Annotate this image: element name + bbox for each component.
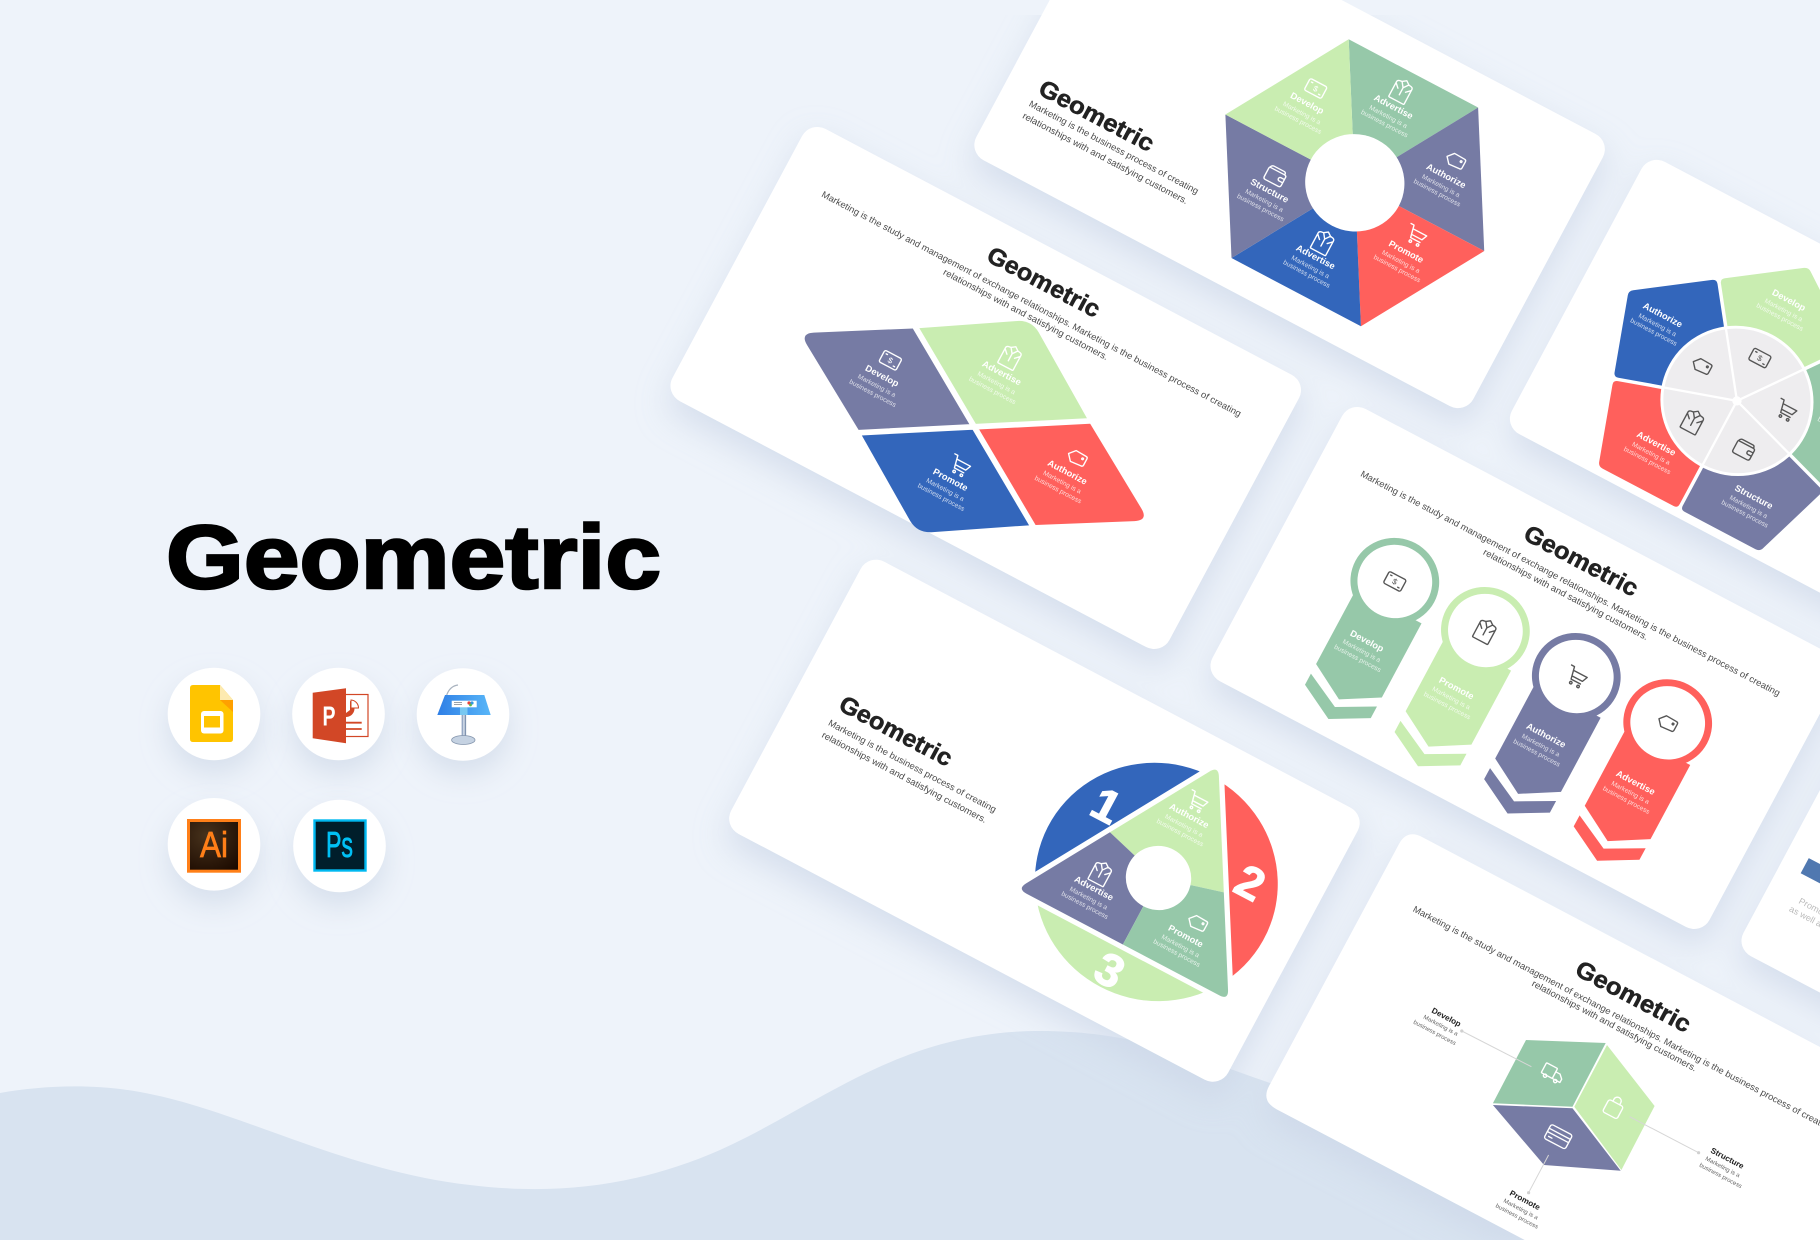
icon: PowerPoint bbox=[292, 668, 385, 760]
rhombus chart: business process bbox=[848, 379, 898, 409]
hexagon chart: Develop bbox=[1289, 90, 1326, 116]
heading: Geometric bbox=[1034, 75, 1159, 158]
circle and triangle chart: Marketing is a bbox=[1163, 813, 1204, 839]
arrow tag: Develop bbox=[1283, 522, 1455, 737]
pentagon chart: Marketing is a bbox=[1728, 495, 1769, 520]
rhombus chart: business process bbox=[1033, 475, 1083, 506]
icon: Illustrator bbox=[168, 798, 260, 891]
hexagon chart: business process bbox=[1273, 106, 1323, 136]
rhombus chart: Marketing is a bbox=[925, 477, 965, 503]
panel: arrow tags slide bbox=[1204, 401, 1820, 935]
pentagon chart: Marketing is a bbox=[1763, 298, 1804, 323]
pentagon chart: business process bbox=[1629, 317, 1679, 348]
hexagon chart bbox=[1167, 5, 1543, 360]
icon: PowerPoint: P bbox=[322, 700, 336, 732]
hexagon chart: Marketing is a bbox=[1290, 255, 1331, 280]
hexagon chart: Marketing is a bbox=[1380, 249, 1421, 275]
arrow tag: Authorize bbox=[1465, 617, 1636, 832]
arrow tag: Promote: business process bbox=[1422, 691, 1472, 722]
description: relationships with and satisfying customers. bbox=[1482, 547, 1650, 642]
hexagon chart: $ bbox=[1311, 84, 1320, 94]
slide text: relationships with and satisfying customers. bbox=[1530, 978, 1698, 1073]
slide text: Marketing is a bbox=[1502, 1198, 1539, 1222]
rhombus chart: Marketing is a bbox=[856, 373, 897, 399]
pentagon chart: Structure bbox=[1733, 483, 1775, 511]
heading: Geometric bbox=[982, 242, 1105, 323]
pentagon chart: Develop bbox=[1770, 287, 1808, 313]
pentagon chart: business process bbox=[1720, 499, 1770, 530]
rhombus chart bbox=[749, 234, 1199, 619]
hexagon chart: business process bbox=[1236, 193, 1285, 224]
arrow tag: Promote: Promote bbox=[1437, 675, 1476, 701]
panel: rhombus slide bbox=[663, 121, 1307, 657]
icon: Photoshop: Ps bbox=[326, 824, 353, 865]
arrow tag: Develop: business process bbox=[1333, 644, 1383, 674]
slide text: Develop bbox=[1430, 1006, 1462, 1029]
panel: cube slide bbox=[1266, 834, 1820, 1240]
description: Marketing is the study and management of exchange relationships. Marketing is the business process of creating bbox=[820, 189, 1243, 419]
rhombus chart: Advertise bbox=[981, 359, 1023, 387]
arrow tag: Develop: $ bbox=[1391, 577, 1399, 587]
arrow tag: Authorize: business process bbox=[1512, 738, 1562, 769]
circle and triangle chart: 2 bbox=[1227, 854, 1274, 911]
pentagon chart: business process bbox=[1755, 302, 1805, 333]
panel: pentagon slide bbox=[1489, 154, 1820, 715]
card shadows bbox=[665, 0, 1820, 1240]
circle and triangle chart: business process bbox=[1155, 818, 1205, 849]
rhombus chart: Promote bbox=[931, 467, 970, 493]
hexagon chart: Advertise bbox=[1294, 243, 1337, 271]
hexagon chart: Marketing is a bbox=[1244, 188, 1284, 214]
arrow tag: Develop: Marketing is a bbox=[1341, 639, 1382, 664]
hexagon chart: business process bbox=[1360, 109, 1409, 140]
background wave bbox=[0, 1031, 1600, 1240]
slide text: Structure bbox=[1709, 1146, 1746, 1171]
pentagon chart: Authorize bbox=[1641, 301, 1684, 330]
arrow tag: Promote: Marketing is a bbox=[1431, 686, 1471, 712]
slide text: Geometric bbox=[1571, 956, 1695, 1038]
circle and triangle chart bbox=[989, 709, 1326, 1049]
hexagon chart: Marketing is a bbox=[1368, 104, 1408, 130]
pentagon chart: Marketing is a bbox=[1631, 441, 1671, 467]
circle and triangle chart: Advertise bbox=[1073, 874, 1115, 903]
slide text: Marketing is a bbox=[1704, 1156, 1741, 1180]
panel: partial slide at far right bbox=[1735, 676, 1820, 1210]
description: Marketing is the study and management of exchange relationships. Marketing is the business process of creating bbox=[1359, 469, 1782, 698]
circle and triangle chart: Marketing is a bbox=[1160, 934, 1201, 959]
circle and triangle chart: business process bbox=[1060, 891, 1110, 921]
hexagon chart: business process bbox=[1412, 178, 1462, 209]
description: Marketing is the business process of creating bbox=[1027, 99, 1200, 196]
arrow tag: Advertise: Advertise bbox=[1614, 768, 1657, 797]
hexagon chart: Authorize bbox=[1425, 161, 1468, 190]
rhombus chart: Develop bbox=[864, 363, 901, 389]
slide text: business process bbox=[1412, 1020, 1457, 1047]
slide text: Marketing is the study and management of exchange relationships. Marketing is the business process of creating bbox=[1411, 904, 1820, 1133]
arrow tag: Authorize: Authorize bbox=[1525, 721, 1567, 750]
arrow tag: Promote bbox=[1375, 571, 1545, 785]
hexagon chart: Advertise bbox=[1372, 92, 1415, 121]
rhombus chart: business process bbox=[968, 376, 1017, 406]
description: Marketing is the business process of creating bbox=[827, 718, 998, 814]
icon: Photoshop bbox=[293, 800, 386, 892]
rhombus chart: Marketing is a bbox=[1042, 470, 1082, 496]
hexagon chart: Marketing is a bbox=[1281, 101, 1322, 127]
hexagon chart: business process bbox=[1372, 254, 1422, 285]
circle and triangle chart: Authorize bbox=[1168, 801, 1211, 830]
heading: Geometric bbox=[1519, 520, 1643, 602]
slide text: business process bbox=[1698, 1163, 1743, 1190]
panel: triangle slide bbox=[723, 554, 1366, 1088]
icon: Illustrator: Ai bbox=[200, 824, 228, 865]
hexagon chart: Marketing is a bbox=[1420, 173, 1461, 199]
rhombus chart: business process bbox=[916, 483, 966, 513]
slide text bbox=[1306, 876, 1820, 1240]
arrow tag: Advertise bbox=[1555, 664, 1728, 880]
pentagon chart: business process bbox=[1622, 446, 1672, 476]
slide text: business process bbox=[1494, 1203, 1539, 1231]
pentagon chart: Advertise bbox=[1635, 429, 1678, 458]
arrow tag: Authorize: Marketing is a bbox=[1520, 733, 1561, 759]
description: relationships with and satisfying customers. bbox=[1021, 111, 1190, 206]
rhombus chart: $ bbox=[886, 356, 895, 366]
circle and triangle chart: business process bbox=[1152, 938, 1202, 969]
arrow tag: Advertise: Marketing is a bbox=[1610, 780, 1650, 806]
circle and triangle chart: 1 bbox=[1083, 777, 1130, 834]
slide text: Promote bbox=[1508, 1189, 1542, 1212]
hexagon chart: business process bbox=[1282, 259, 1332, 290]
cube chart bbox=[1460, 1029, 1700, 1194]
pentagon chart bbox=[1512, 190, 1820, 622]
heading: Geometric bbox=[834, 691, 957, 772]
arrow tag: Develop: Develop bbox=[1348, 628, 1386, 654]
hexagon chart: Structure bbox=[1249, 177, 1290, 205]
circle and triangle chart: Marketing is a bbox=[1068, 886, 1109, 912]
pentagon chart: Marketing is a bbox=[1637, 313, 1678, 338]
slide text: Marketing is a bbox=[1422, 1015, 1459, 1038]
description: relationships with and satisfying customers. bbox=[942, 267, 1110, 362]
rhombus chart: Authorize bbox=[1046, 458, 1089, 487]
circle and triangle chart: 3 bbox=[1086, 941, 1133, 999]
pentagon chart: $ bbox=[1756, 353, 1764, 364]
panel: hexagon slide bbox=[968, 0, 1611, 414]
description: relationships with and satisfying customers. bbox=[820, 730, 988, 825]
icon: Keynote bbox=[417, 668, 509, 761]
slide body bbox=[1266, 834, 1820, 1240]
circle and triangle chart: Promote bbox=[1167, 923, 1205, 949]
rhombus chart: Marketing is a bbox=[976, 371, 1017, 396]
hexagon chart: Promote bbox=[1387, 239, 1425, 265]
main title: Geometric bbox=[166, 508, 661, 608]
icon: Google Slides bbox=[168, 668, 260, 760]
arrow tag: Advertise: business process bbox=[1601, 785, 1651, 816]
